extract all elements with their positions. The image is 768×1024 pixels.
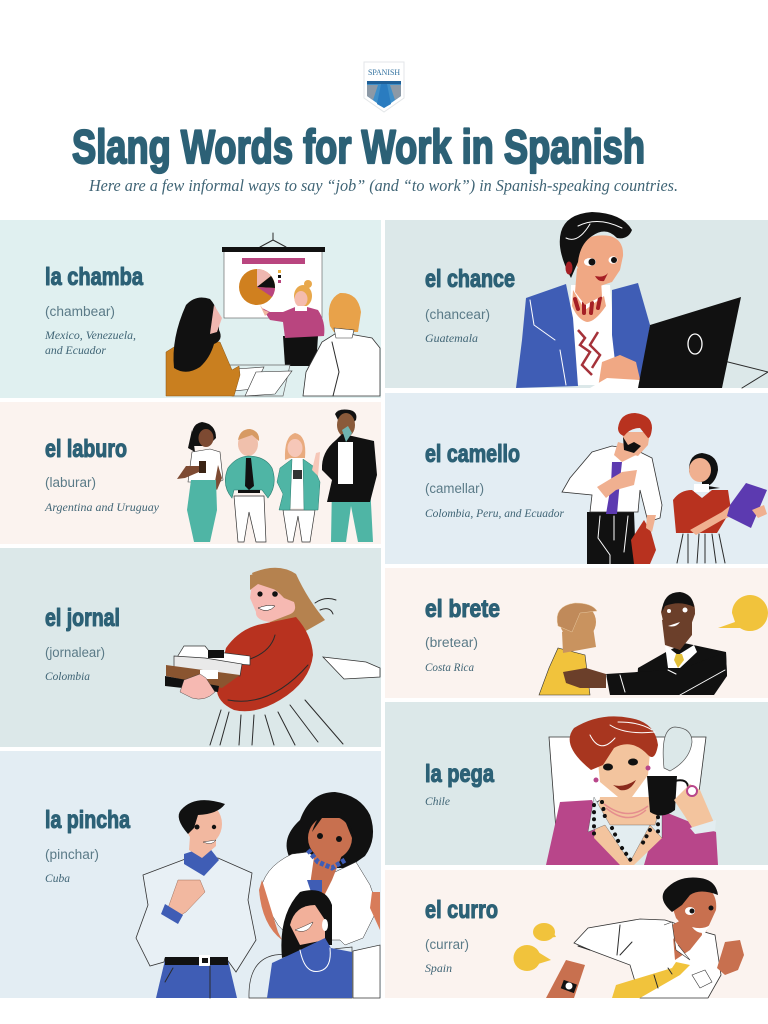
man in black jacket: [331, 484, 373, 542]
panel: la pincha: [0, 751, 381, 998]
countries: Mexico, Venezuela, and Ecuador: Mexico, Venezuela,: [44, 328, 136, 342]
verb: chancear: (chancear): [425, 307, 490, 322]
panel: el brete: [385, 568, 768, 698]
illustration: presentation meeting: [166, 233, 380, 396]
countries: Guatemala: Guatemala: [425, 331, 478, 345]
illustration: handshake on shoulder: [539, 592, 727, 695]
countries: Colombia, Peru, and Ecuador: Colombia, Peru, and Ecuador: [425, 506, 564, 520]
heading: el chance: el chance: [425, 265, 515, 293]
icon: yellow speech bubble: [718, 595, 768, 631]
countries: Spain: Spain: [425, 961, 452, 975]
woman in cardigan: [283, 510, 315, 542]
woman with coffee: [191, 422, 216, 446]
countries: Mexico, Venezuela, and Ecuador: [44, 328, 136, 357]
verb: chambear: (chambear): [45, 304, 115, 319]
illustration: man with turban and girl with folder: [562, 413, 767, 564]
panel: el jornal: [0, 548, 381, 747]
heading: el camello: el camello: [425, 440, 520, 468]
heading: la pega: la pega: [425, 760, 495, 788]
heading: el brete: el brete: [425, 595, 500, 623]
seated woman: [249, 947, 352, 998]
verb: jornalear: (jornalear): [45, 645, 105, 660]
subtitle: Here are a few informal ways to say “job” (and “to work”) in Spanish-speaking countries.: [88, 176, 678, 195]
logo: school shield: [364, 62, 404, 112]
illustration: three colleagues: [136, 792, 380, 998]
countries: Colombia: Colombia: [45, 669, 90, 683]
heading: el laburo: el laburo: [45, 435, 127, 463]
illustration: woman with mug: [546, 716, 718, 865]
man with tie: [234, 496, 266, 542]
heading: el jornal: el jornal: [45, 604, 120, 632]
panel: el laburo: [0, 402, 381, 544]
countries: Mexico, Venezuela, and Ecuador: and Ecuador: [45, 343, 106, 357]
verb: bretear: (bretear): [425, 635, 478, 650]
panel: la chamba: [0, 220, 381, 398]
verb: camellar: (camellar): [425, 481, 484, 496]
panel: la pega: [385, 702, 768, 865]
panel: el curro: [385, 870, 768, 998]
verb: currar: (currar): [425, 937, 469, 952]
logo: school shield: SPANISH: [368, 68, 400, 77]
illustration: woman carrying books: [165, 568, 380, 745]
verb: laburar: (laburar): [45, 475, 96, 490]
heading: la chamba: la chamba: [45, 263, 144, 291]
countries: Chile: Chile: [425, 794, 451, 808]
verb: pinchar: (pinchar): [45, 847, 99, 862]
panel: el chance: [385, 212, 768, 388]
man with hand on chest: [156, 960, 237, 998]
panel: el camello: [385, 393, 768, 564]
illustration: woman at laptop: [516, 212, 768, 388]
heading: el curro: el curro: [425, 896, 498, 924]
countries: Costa Rica: Costa Rica: [425, 660, 474, 674]
illustration: man running with tie: [546, 878, 744, 998]
woman with necklace: [287, 792, 373, 868]
heading: la pincha: la pincha: [45, 806, 131, 834]
countries: Argentina and Uruguay: Argentina and Uruguay: [44, 500, 160, 514]
icon: yellow speech bubbles: [514, 923, 556, 971]
countries: Cuba: Cuba: [45, 871, 70, 885]
illustration: four coworkers: [177, 410, 377, 542]
